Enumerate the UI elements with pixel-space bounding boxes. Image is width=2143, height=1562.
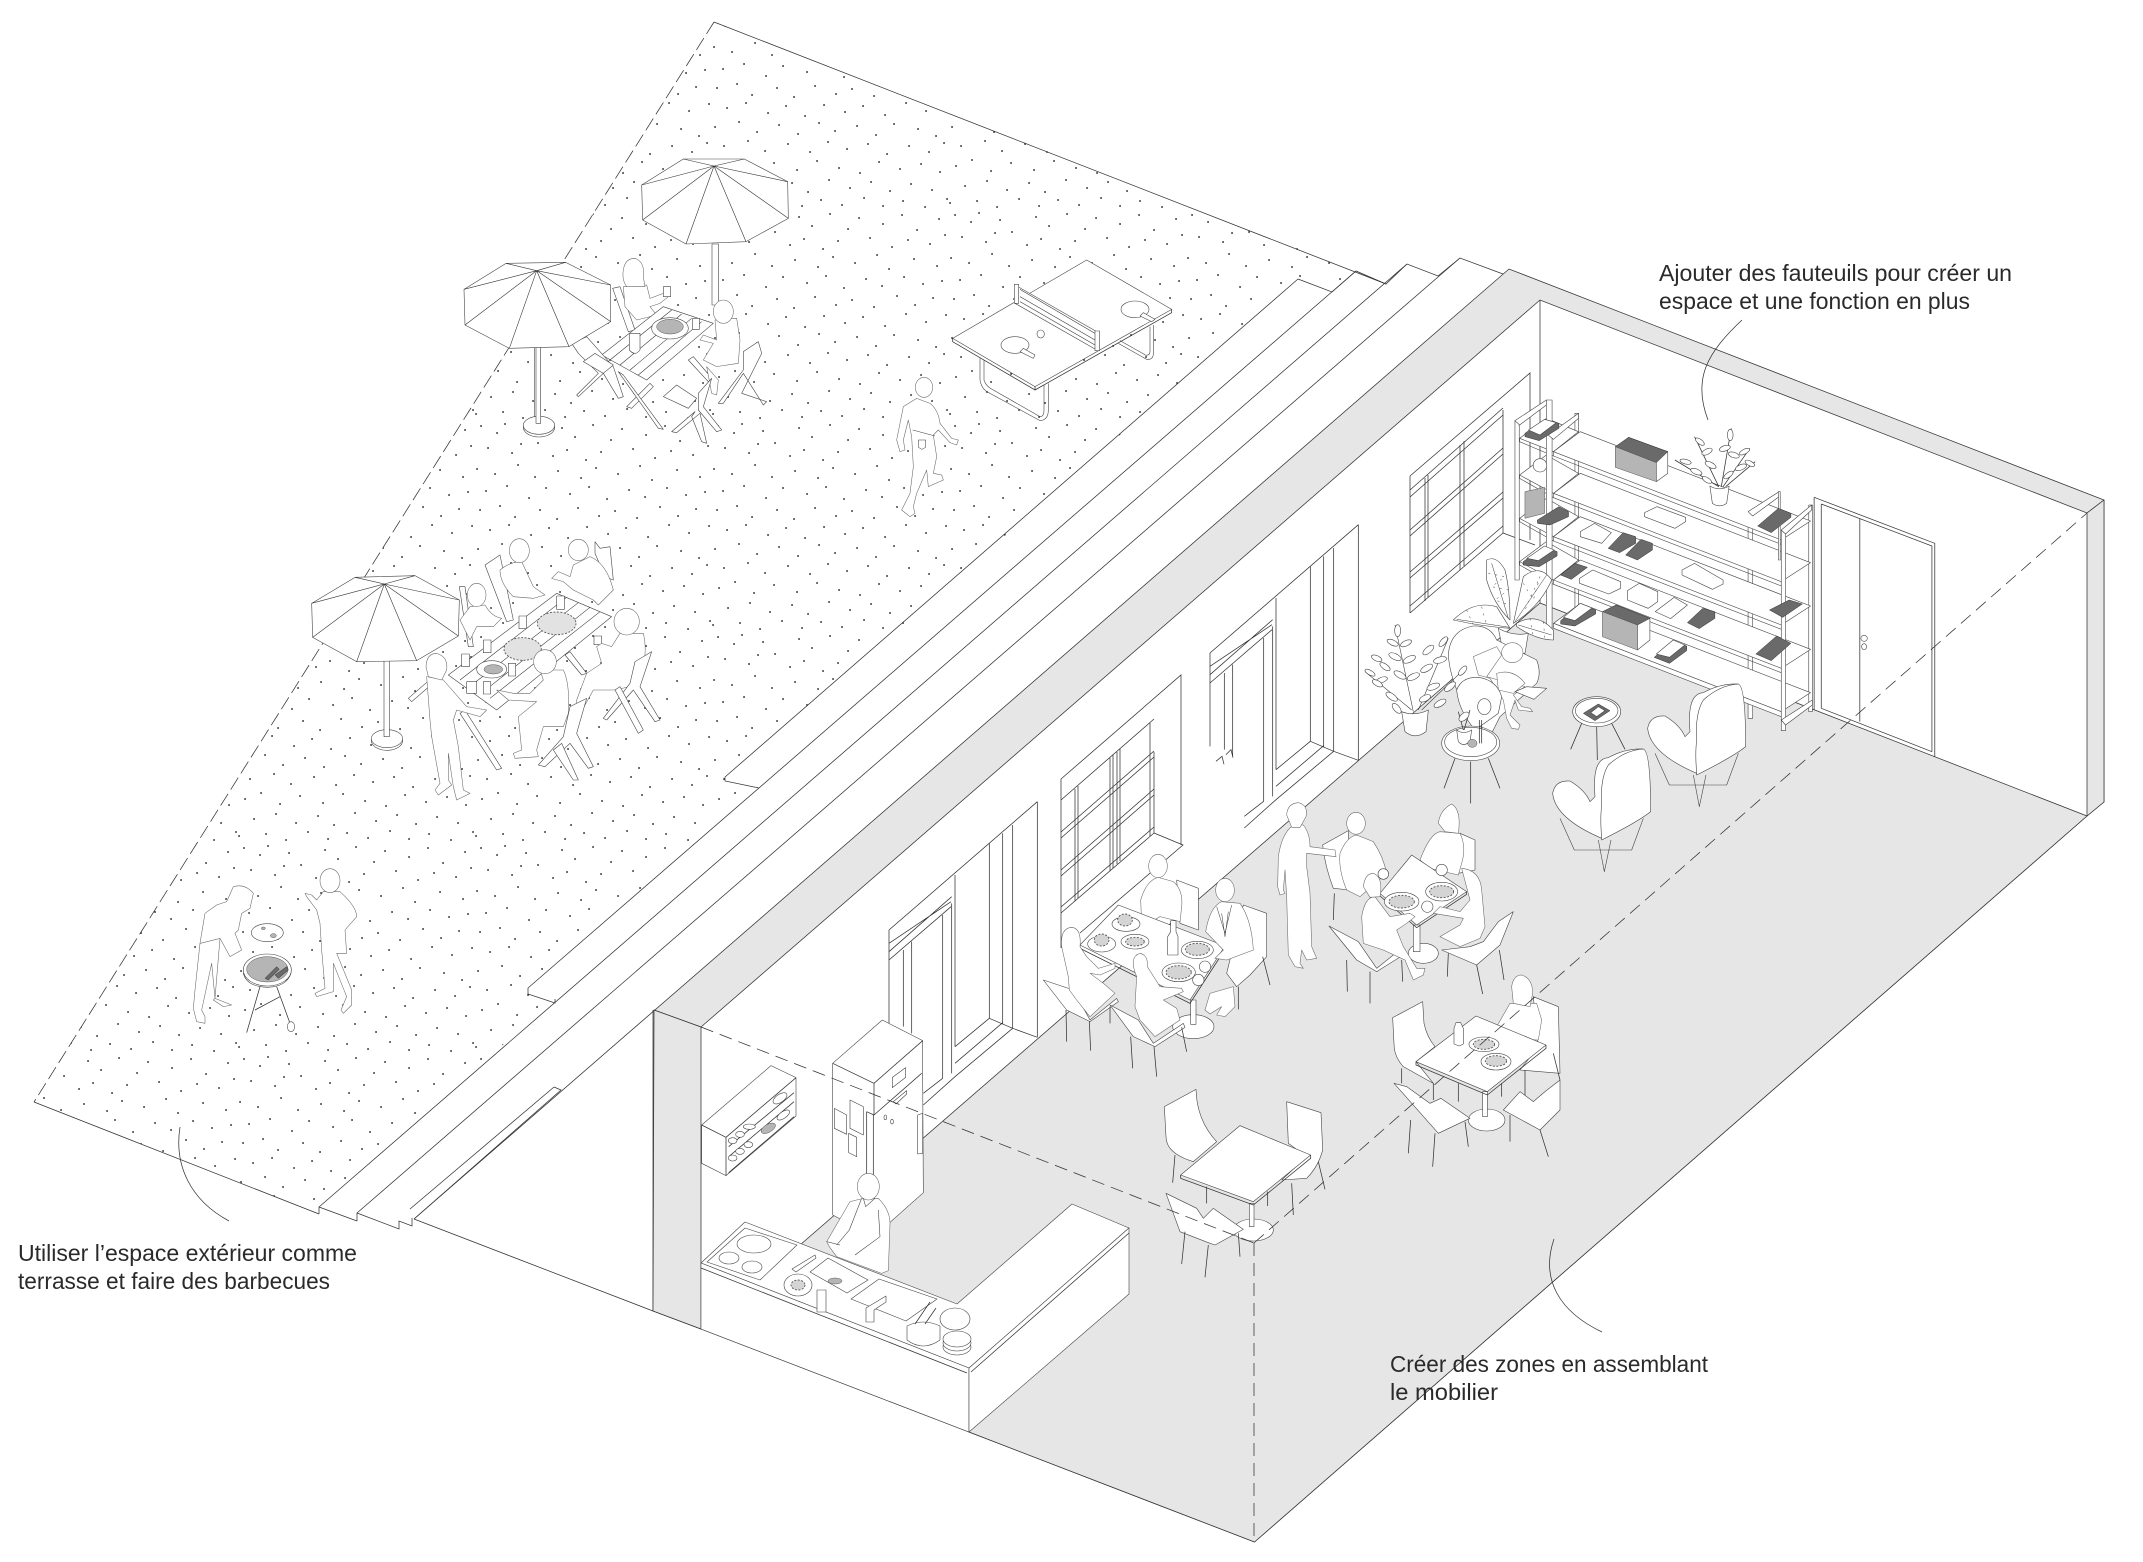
left cut wall xyxy=(653,1010,701,1329)
right wall door xyxy=(1814,497,1935,757)
left section boards xyxy=(1520,418,1578,584)
note: armchairs, line 2: espace et une fonction en plus xyxy=(1659,288,1970,314)
lounge: monstera plant xyxy=(1453,559,1553,653)
note: terrace: Utiliser l’espace extérieur comme xyxy=(18,1240,357,1266)
shelf front frames xyxy=(1515,400,1812,731)
lounge: small table with plants xyxy=(1442,699,1500,803)
hob xyxy=(707,1228,797,1280)
dining group: table with one woman xyxy=(1393,975,1560,1167)
bowl and cutting board xyxy=(784,1274,812,1296)
terrace table with five people xyxy=(408,539,660,800)
floor xyxy=(800,603,2087,1542)
kitchen counter xyxy=(701,1204,1129,1432)
shelf back frames xyxy=(1515,413,1812,712)
lounge: round side tables xyxy=(1571,697,1625,760)
books xyxy=(1523,419,1802,663)
ping-pong table xyxy=(953,260,1172,421)
note: zones, line 2: le mobilier xyxy=(1390,1379,1498,1405)
dining group: table with four people, waiter xyxy=(1278,803,1513,1003)
wall cabinet with dishes xyxy=(702,1066,796,1176)
dining group: four people at two tables xyxy=(1043,854,1270,1077)
far window xyxy=(1410,373,1535,613)
terrace table with two people xyxy=(572,258,767,443)
note: armchairs: Ajouter des fauteuils pour créer un xyxy=(1659,260,2012,286)
sink xyxy=(851,1279,937,1321)
right cut wall xyxy=(2087,500,2104,816)
note: terrace, line 2: terrasse et faire des barbecues xyxy=(18,1268,330,1294)
empty table with chairs xyxy=(1164,1089,1325,1277)
umbrella top left xyxy=(464,262,611,437)
lounge: zz plant in pot xyxy=(1364,625,1468,736)
fridge xyxy=(833,1020,923,1237)
window, middle wall xyxy=(1061,675,1183,948)
building wall top band xyxy=(414,269,2104,1219)
umbrella top right xyxy=(642,159,788,305)
chef xyxy=(827,1173,890,1273)
shelf boards xyxy=(1554,432,1811,717)
umbrella middle xyxy=(312,576,459,750)
dashed cut lines xyxy=(701,513,2087,1542)
building wall outlines xyxy=(414,269,2104,1542)
waiter xyxy=(1278,825,1336,968)
top shelf plant xyxy=(1675,428,1756,506)
bookshelf xyxy=(1515,400,1812,731)
roof step lines xyxy=(319,258,1503,1311)
pot, bowl and plates xyxy=(907,1322,940,1346)
lounge: reading person in armchairs xyxy=(1448,626,1547,737)
middle door xyxy=(1210,525,1358,828)
walking person xyxy=(897,377,958,517)
terrace ground with stipple xyxy=(34,22,1386,1214)
leader lines xyxy=(179,320,1742,1332)
note: zones: Créer des zones en assemblant xyxy=(1390,1351,1709,1377)
lounge: armchairs xyxy=(1553,684,1746,872)
door and recess near kitchen xyxy=(889,802,1037,1105)
barbecue with two people xyxy=(193,869,357,1033)
